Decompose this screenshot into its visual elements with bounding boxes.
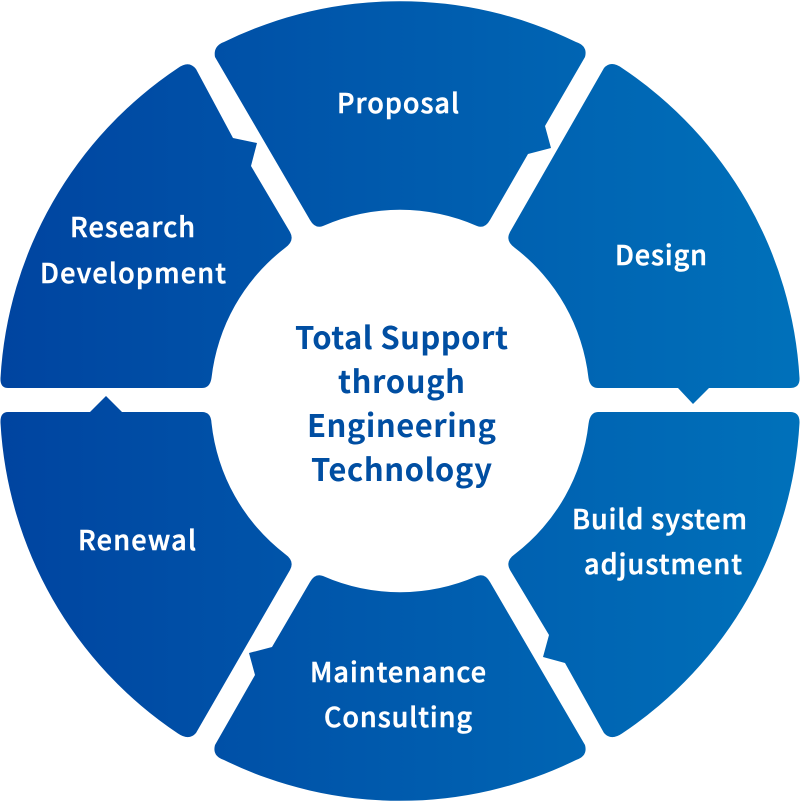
segment: Proposal: Proposal (337, 82, 459, 121)
segment: Design: Design (615, 234, 707, 273)
center title: through (338, 357, 465, 402)
center title: Technology (311, 445, 492, 490)
segment: Proposal (215, 1, 586, 227)
center title: Engineering (307, 401, 496, 446)
segment: Renewal: Renewal (78, 519, 196, 558)
center title: Total Support (295, 313, 508, 358)
segment: Build system adjustment: Build system (572, 498, 747, 537)
center title (295, 313, 508, 490)
segment: Research Development (0, 64, 292, 388)
segment: Build system adjustment (508, 412, 800, 737)
segment: Design (508, 64, 800, 404)
segment: Build system adjustment: adjustment (584, 543, 742, 582)
segment: Maintenance Consulting: Maintenance (310, 651, 486, 690)
segment: Maintenance Consulting (214, 575, 586, 801)
segment: Research Development: Development (40, 252, 226, 291)
segment: Research Development: Research (70, 206, 195, 245)
segment: Maintenance Consulting: Consulting (324, 696, 472, 735)
segment: Renewal (0, 396, 292, 737)
